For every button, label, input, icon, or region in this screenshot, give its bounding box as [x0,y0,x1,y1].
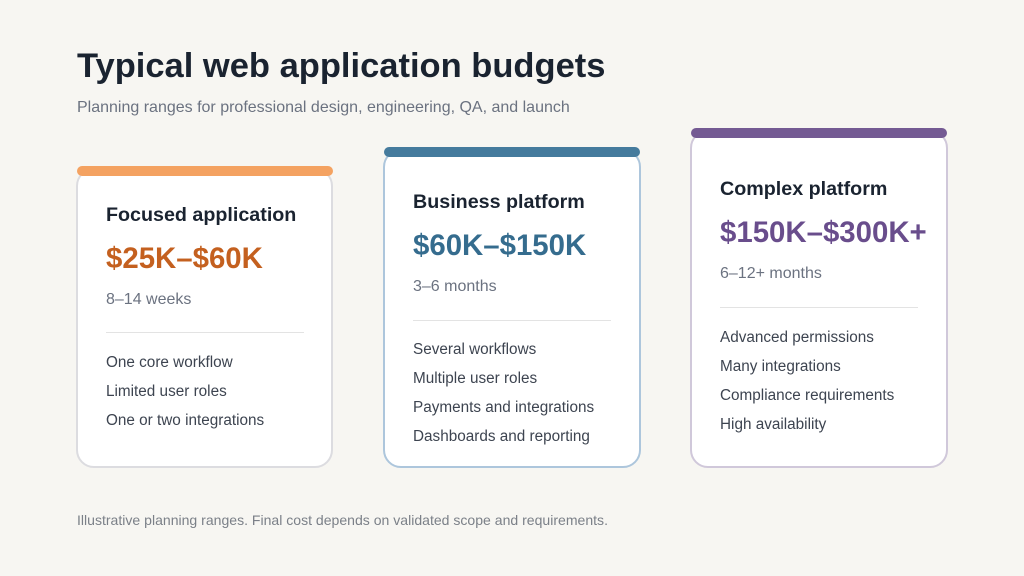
feature list: Multiple user roles [413,370,537,387]
accent bar [77,166,333,176]
title: Typical web application budgets [77,47,605,85]
feature list: Advanced permissions [720,329,874,346]
panel: business platform [383,147,641,468]
card heading: Complex platform [720,178,887,200]
panel: complex platform [690,128,948,468]
accent bar [691,128,947,138]
feature list: Dashboards and reporting [413,428,590,445]
feature list: Limited user roles [106,383,227,400]
feature list: Several workflows [413,341,536,358]
card heading: Business platform [413,191,585,213]
price range: $60K–$150K [413,229,586,262]
price range: $25K–$60K [106,242,263,275]
feature list [106,354,264,429]
feature list: One core workflow [106,354,233,371]
panel: focused application [76,166,333,468]
card background [76,168,333,468]
price range: $150K–$300K+ [720,216,927,249]
feature list: Many integrations [720,358,841,375]
card background [690,130,948,468]
feature list: Payments and integrations [413,399,594,416]
feature list: One or two integrations [106,412,264,429]
duration: 3–6 months [413,278,497,295]
feature list [720,329,894,433]
subtitle: Planning ranges for professional design, engineering, QA, and launch [77,99,570,116]
feature list: Compliance requirements [720,387,894,404]
feature list [413,341,594,445]
duration: 6–12+ months [720,265,822,282]
feature list: High availability [720,416,826,433]
card background [383,149,641,468]
accent bar [384,147,640,157]
duration: 8–14 weeks [106,291,191,308]
card heading: Focused application [106,204,296,226]
footnote: Illustrative planning ranges. Final cost depends on validated scope and requirements. [77,512,608,528]
